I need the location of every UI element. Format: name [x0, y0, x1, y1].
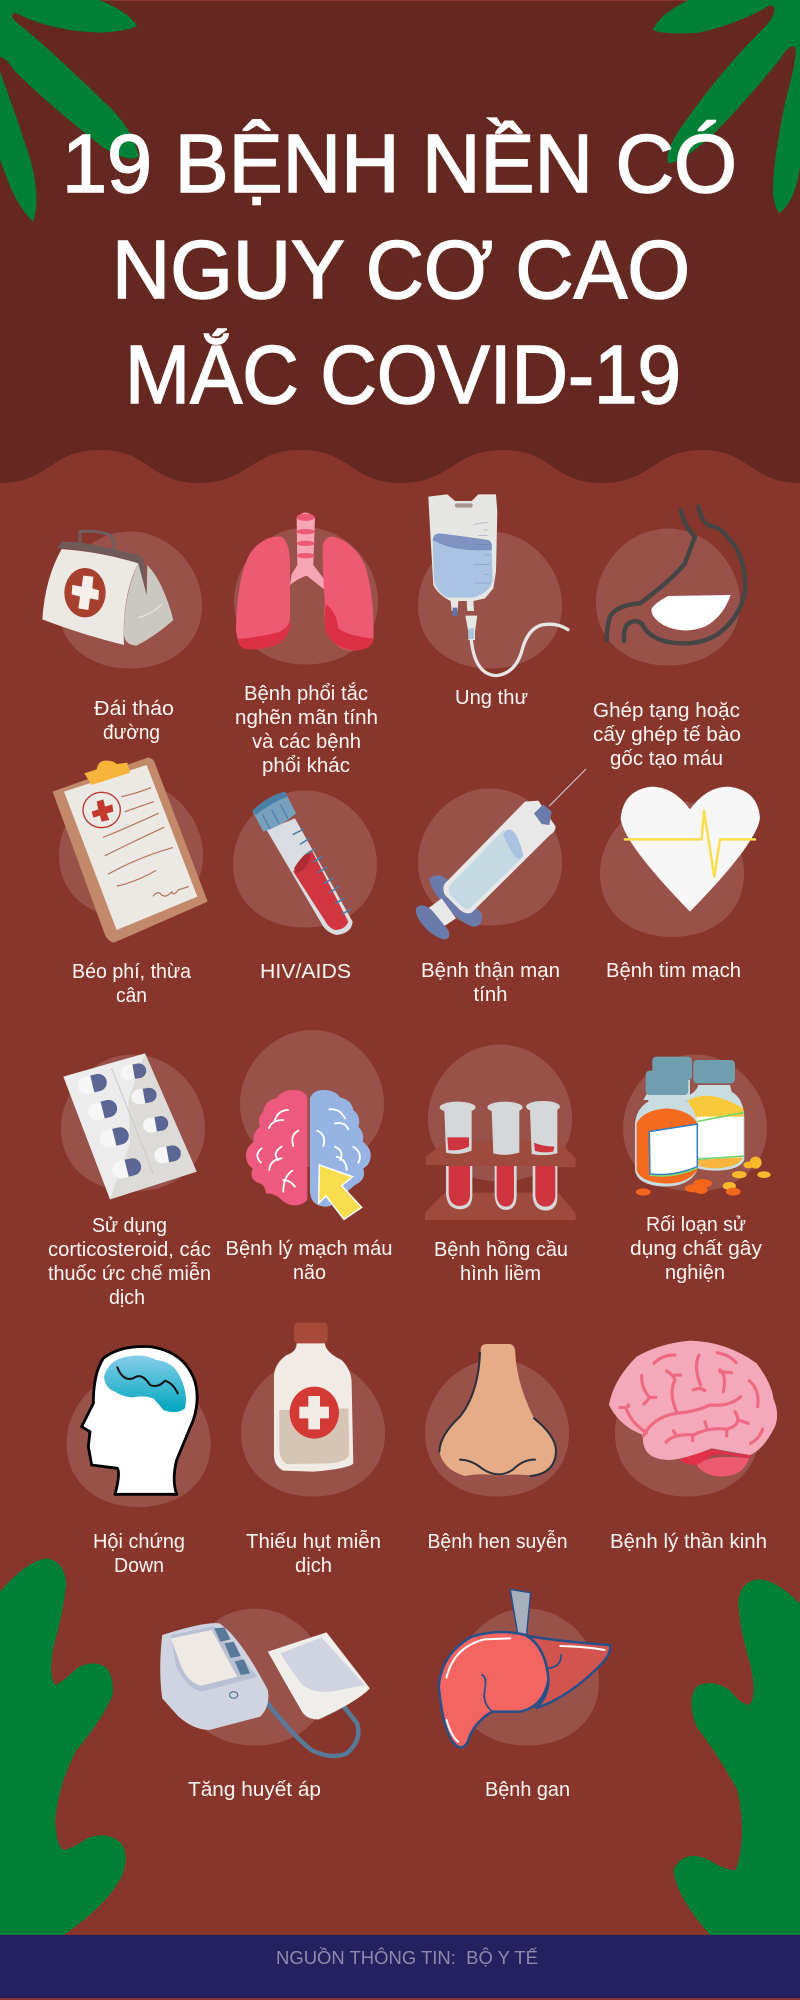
label: [630, 1214, 762, 1284]
panel: diabetes: [42, 531, 202, 744]
label: [246, 1530, 381, 1577]
icon: lungs: [236, 512, 374, 651]
panel: Down syndrome: [66, 1346, 210, 1577]
icon: medicine bottle: [274, 1323, 353, 1472]
label: Bệnh tim mạch: [606, 960, 741, 982]
header band with wavy edge: [0, 1, 800, 483]
label: cấy ghép tế bào: [593, 724, 741, 746]
panel: cancer: [418, 494, 568, 709]
label: hình liềm: [460, 1263, 541, 1285]
icon: brain: [609, 1341, 777, 1477]
title: MẮC COVID-19: [125, 328, 681, 421]
label: [94, 698, 174, 744]
panel: sickle cell disease: [425, 1044, 576, 1285]
label: Béo phí, thừa: [72, 961, 192, 983]
label: Ung thư: [455, 687, 528, 709]
label: Rối loạn sử: [646, 1214, 746, 1236]
label: Bệnh hen suyễn: [428, 1530, 568, 1553]
label: [48, 1215, 211, 1309]
label: Bệnh lý thần kinh: [610, 1531, 767, 1553]
panel: heart disease: [600, 787, 760, 982]
label: dịch: [295, 1555, 332, 1577]
panel: transplant: [593, 507, 745, 770]
label: [93, 1531, 185, 1577]
label: dụng chất gây: [630, 1238, 762, 1260]
label: HIV/AIDS: [260, 961, 351, 983]
label: Thiếu hụt miễn: [246, 1530, 381, 1553]
label: Sử dụng: [92, 1215, 167, 1237]
icon: head silhouette: [82, 1346, 197, 1494]
icon: syringe: [416, 769, 586, 939]
label: nghiện: [665, 1262, 725, 1284]
panel: immunodeficiency: [241, 1323, 385, 1577]
label: tính: [474, 984, 508, 1006]
label: Bệnh phổi tắc: [244, 682, 368, 705]
label: [72, 961, 192, 1007]
panel: HIV/AIDS: [233, 790, 377, 983]
icon: medical bag: [42, 531, 173, 646]
title: 19 BỆNH NỀN CÓ: [62, 117, 737, 210]
icon: IV drip bag: [428, 494, 568, 676]
icon: nose: [439, 1344, 556, 1476]
label: [593, 700, 741, 770]
panel: corticosteroid use: [48, 1053, 211, 1309]
label: Đái tháo: [94, 698, 174, 720]
panel: neurological disease: [609, 1341, 777, 1553]
title: [62, 117, 737, 421]
panel: cerebrovascular disease: [226, 1030, 392, 1284]
label: [226, 1238, 392, 1284]
panel: substance use disorder: [623, 1054, 771, 1284]
label: corticosteroid, các: [48, 1239, 211, 1261]
icon: pill bottles: [635, 1057, 771, 1196]
label: Down: [114, 1555, 164, 1577]
icon: blister pack: [63, 1053, 197, 1199]
decoration: top-left leaves: [0, 0, 139, 222]
icon: blood test tube: [252, 792, 353, 935]
label: Bệnh thận mạn: [421, 960, 560, 982]
label: Bệnh lý mạch máu: [226, 1238, 392, 1260]
icon: stomach: [607, 507, 745, 643]
icon: test tube rack: [425, 1101, 576, 1220]
footer band: [0, 1935, 800, 1998]
label: Ghép tạng hoặc: [593, 700, 740, 722]
label: Bệnh gan: [485, 1779, 570, 1801]
label: và các bệnh: [252, 731, 361, 753]
label: đường: [103, 722, 160, 744]
panel: liver disease: [439, 1589, 610, 1801]
footer source text: NGUỒN THÔNG TIN: BỘ Y TẾ: [276, 1947, 538, 1968]
label: Tăng huyết áp: [188, 1779, 321, 1801]
panel: chronic kidney disease: [416, 769, 586, 1006]
panel: asthma: [425, 1344, 569, 1553]
icon: clipboard: [53, 757, 208, 943]
label: nghẽn mãn tính: [235, 707, 378, 729]
label: [434, 1239, 568, 1285]
label: [421, 960, 560, 1006]
label: Hội chứng: [93, 1531, 185, 1553]
label: gốc tạo máu: [610, 748, 723, 770]
label: Bệnh hồng cầu: [434, 1239, 568, 1261]
panel: obesity: [53, 757, 208, 1007]
label: phổi khác: [262, 755, 350, 777]
panel: COPD: [234, 512, 378, 777]
title: NGUY CƠ CAO: [112, 223, 690, 316]
decoration: bottom-right leaf: [673, 1579, 800, 1935]
decoration: top-right leaves: [653, 0, 800, 213]
decoration: bottom-left leaf: [0, 1558, 126, 1935]
label: cân: [116, 985, 147, 1007]
panel: hypertension: [160, 1608, 370, 1801]
icon: liver: [439, 1589, 610, 1747]
label: não: [293, 1262, 326, 1284]
icon: two-colour brain with cursor: [246, 1090, 371, 1219]
icon: heart with pulse line: [621, 787, 760, 912]
label: [235, 682, 378, 777]
label: thuốc ức chế miễn: [48, 1262, 211, 1285]
label: dịch: [109, 1287, 145, 1309]
icon: blood pressure monitor: [160, 1623, 370, 1756]
